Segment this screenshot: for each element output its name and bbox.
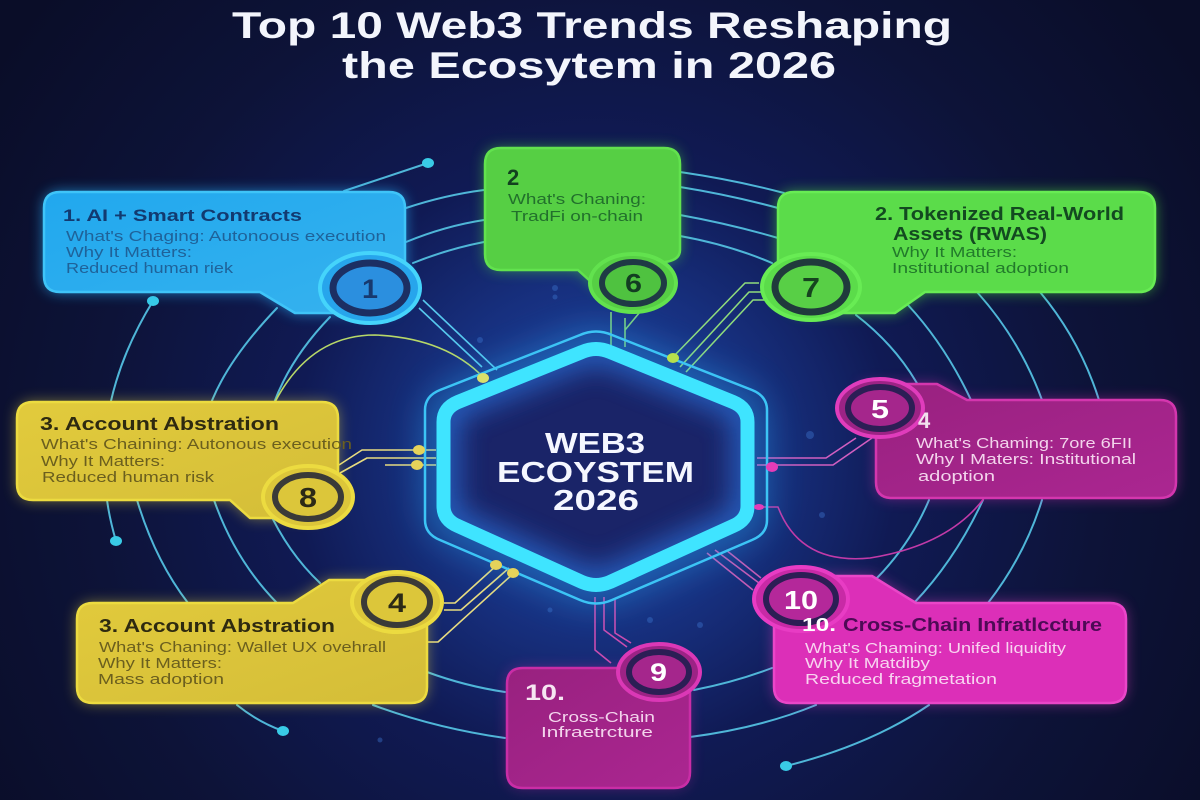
heading: 10. [802,615,836,635]
body text: Cross-Chain [548,709,655,726]
panel: Tokenized Real-World Assets [762,192,1155,320]
heading [875,204,1124,244]
body text: What's Chaging: Autonoous execution [66,228,386,245]
body text [805,640,1067,688]
heading: 2. Tokenized Real-World [875,204,1124,224]
body text: Institutional adoption [892,260,1069,277]
body text: Reduced human riek [66,260,234,277]
heading: 3. Account Abstration [40,414,279,434]
connector traces [339,283,872,663]
network end dots [110,158,792,771]
heading: 10. [525,680,565,705]
body text [98,639,386,688]
badge 6: 6 [625,268,642,298]
badge 4: 4 [388,588,406,618]
panel: item 4 [837,379,1176,498]
hexagon label: ECOYSTEM [497,457,694,489]
badge 9 [618,644,700,700]
body text: Why It Matters: [41,453,165,470]
body text [508,191,646,225]
body text: Why It Matters: [98,655,222,672]
body text: adoption [918,468,995,485]
body text: What's Chaning: [508,191,646,208]
body text: Why It Matters: [892,244,1017,261]
body text: Why I Maters: Institutional [916,451,1136,468]
panel: Account Abstration lower [77,572,442,703]
central hexagon [425,332,767,604]
body text: What's Chaning: Wallet UX ovehrall [99,639,386,656]
badge 4 [352,572,442,632]
body text: Infraetrcture [541,724,653,741]
body text: Why It Matdiby [805,655,931,672]
hexagon label: WEB3 [545,428,645,460]
body text [541,709,655,741]
badge 6 [590,254,676,312]
badge 8: 8 [299,482,317,513]
heading: 3. Account Abstration [99,616,335,636]
heading: 4 [918,408,931,433]
body text: What's Chaming: 7ore 6FII [916,435,1132,452]
badge 9: 9 [650,659,667,687]
body text: Reduced human risk [42,469,215,486]
body text: What's Chaming: Unifed liquidity [805,640,1067,657]
body text [916,435,1136,485]
badge 1: 1 [362,274,378,304]
badge 7 [762,254,860,320]
title [232,5,952,86]
body text [892,244,1069,277]
panel: AI + Smart Contracts [44,192,420,323]
heading: Cross-Chain Infratlccture [843,615,1102,635]
body text: Why It Matters: [66,244,192,261]
panel: Account Abstration upper [17,402,353,528]
badge 8 [263,466,353,528]
body text [41,436,352,486]
faint background specks [378,285,825,742]
hexagon label: 2026 [553,485,639,517]
body text: What's Chaining: Autonous execution [41,436,352,453]
body text: TradFi on-chain [511,208,643,225]
badge 1 [320,253,420,323]
badge 5: 5 [871,394,889,424]
panel: Cross-Chain Infrastructure [754,567,1126,703]
hexagon label [497,428,694,517]
badge 7: 7 [802,272,820,303]
concentric network arcs [104,163,1099,766]
title: Top 10 Web3 Trends Reshaping [232,5,952,46]
badge 10 [754,567,848,631]
panel: item 2 TradFi [485,148,680,312]
heading: 1. AI + Smart Contracts [63,206,302,225]
connector nodes [411,353,778,578]
badge 5 [837,379,923,437]
heading: 2 [507,165,519,190]
badge 10: 10 [784,585,818,615]
body text: Reduced fragmetation [805,671,997,688]
title: the Ecosytem in 2026 [342,45,836,86]
body text [66,228,386,277]
heading: Assets (RWAS) [893,224,1047,244]
panel: Cross-Chain item 9 [507,644,700,788]
body text: Mass adoption [98,671,224,688]
